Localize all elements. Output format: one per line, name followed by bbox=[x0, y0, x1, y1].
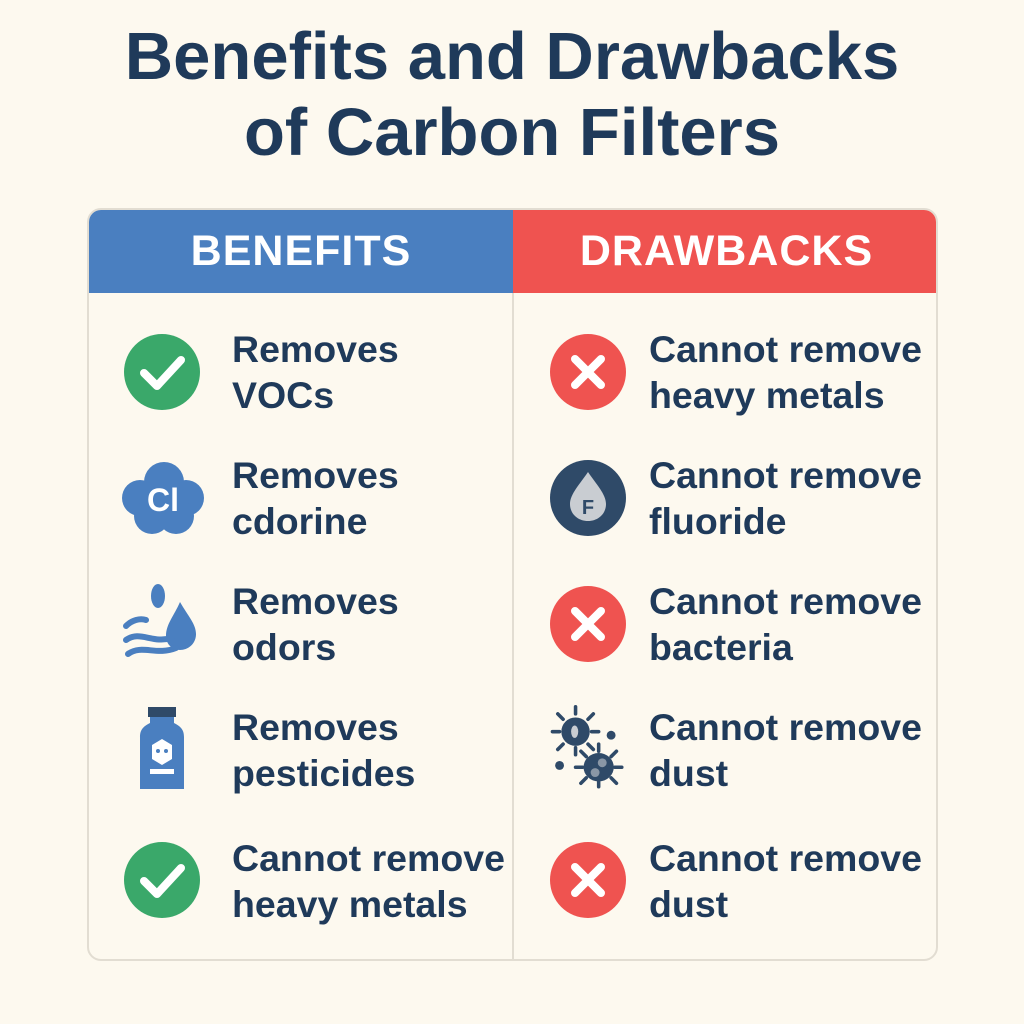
icon: x 3 bbox=[550, 842, 626, 918]
text: dust 1 bbox=[649, 706, 922, 794]
text: heavy metals right bbox=[649, 328, 922, 416]
icon: water odors bbox=[123, 584, 196, 657]
text: pesticides: pesticides bbox=[232, 752, 415, 794]
text: pesticides bbox=[232, 706, 415, 794]
text: heavy metals right: Cannot remove bbox=[649, 328, 922, 370]
text: dust 2 bbox=[649, 837, 922, 925]
icon: chlorine cloud bbox=[122, 462, 204, 534]
text: chlorine bbox=[232, 454, 399, 542]
text: chlorine: cdorine bbox=[232, 500, 367, 542]
title: of Carbon Filters bbox=[244, 95, 780, 170]
text: odors: odors bbox=[232, 626, 336, 668]
text: odors: Removes bbox=[232, 580, 399, 622]
text: fluoride: fluoride bbox=[649, 500, 786, 542]
text: VOCs bbox=[232, 328, 399, 416]
header: drawbacks: DRAWBACKS bbox=[580, 227, 873, 275]
text: heavy metals left bbox=[232, 837, 505, 925]
divider bbox=[512, 293, 514, 963]
text: chlorine: Removes bbox=[232, 454, 399, 496]
text: fluoride: Cannot remove bbox=[649, 454, 922, 496]
text: dust 1: dust bbox=[649, 752, 728, 794]
icon: x 2 bbox=[550, 586, 626, 662]
icon: fluoride bbox=[550, 460, 626, 536]
icon: fluoride: F bbox=[582, 497, 594, 519]
table panel bbox=[87, 208, 938, 961]
text: VOCs: VOCs bbox=[232, 374, 334, 416]
text: bacteria bbox=[649, 580, 922, 668]
text: dust 2: dust bbox=[649, 883, 728, 925]
text: bacteria: Cannot remove bbox=[649, 580, 922, 622]
text: odors bbox=[232, 580, 399, 668]
header: drawbacks bbox=[513, 210, 940, 293]
text: pesticides: Removes bbox=[232, 706, 399, 748]
icon: pesticide bottle bbox=[140, 707, 184, 789]
text: heavy metals left: Cannot remove bbox=[232, 837, 505, 879]
icon: check 1 bbox=[124, 334, 200, 410]
text: bacteria: bacteria bbox=[649, 626, 793, 668]
icon: microbes bbox=[550, 705, 624, 788]
text: heavy metals left: heavy metals bbox=[232, 883, 468, 925]
text: heavy metals right: heavy metals bbox=[649, 374, 885, 416]
text: fluoride bbox=[649, 454, 922, 542]
header: benefits: BENEFITS bbox=[191, 227, 411, 275]
text: VOCs: Removes bbox=[232, 328, 399, 370]
title bbox=[125, 19, 899, 170]
icon: check 2 bbox=[124, 842, 200, 918]
text: dust 1: Cannot remove bbox=[649, 706, 922, 748]
text: dust 2: Cannot remove bbox=[649, 837, 922, 879]
icon: x 1 bbox=[550, 334, 626, 410]
icon: chlorine cloud: Cl bbox=[147, 482, 179, 518]
title: Benefits and Drawbacks bbox=[125, 19, 899, 94]
header: benefits bbox=[89, 210, 513, 293]
